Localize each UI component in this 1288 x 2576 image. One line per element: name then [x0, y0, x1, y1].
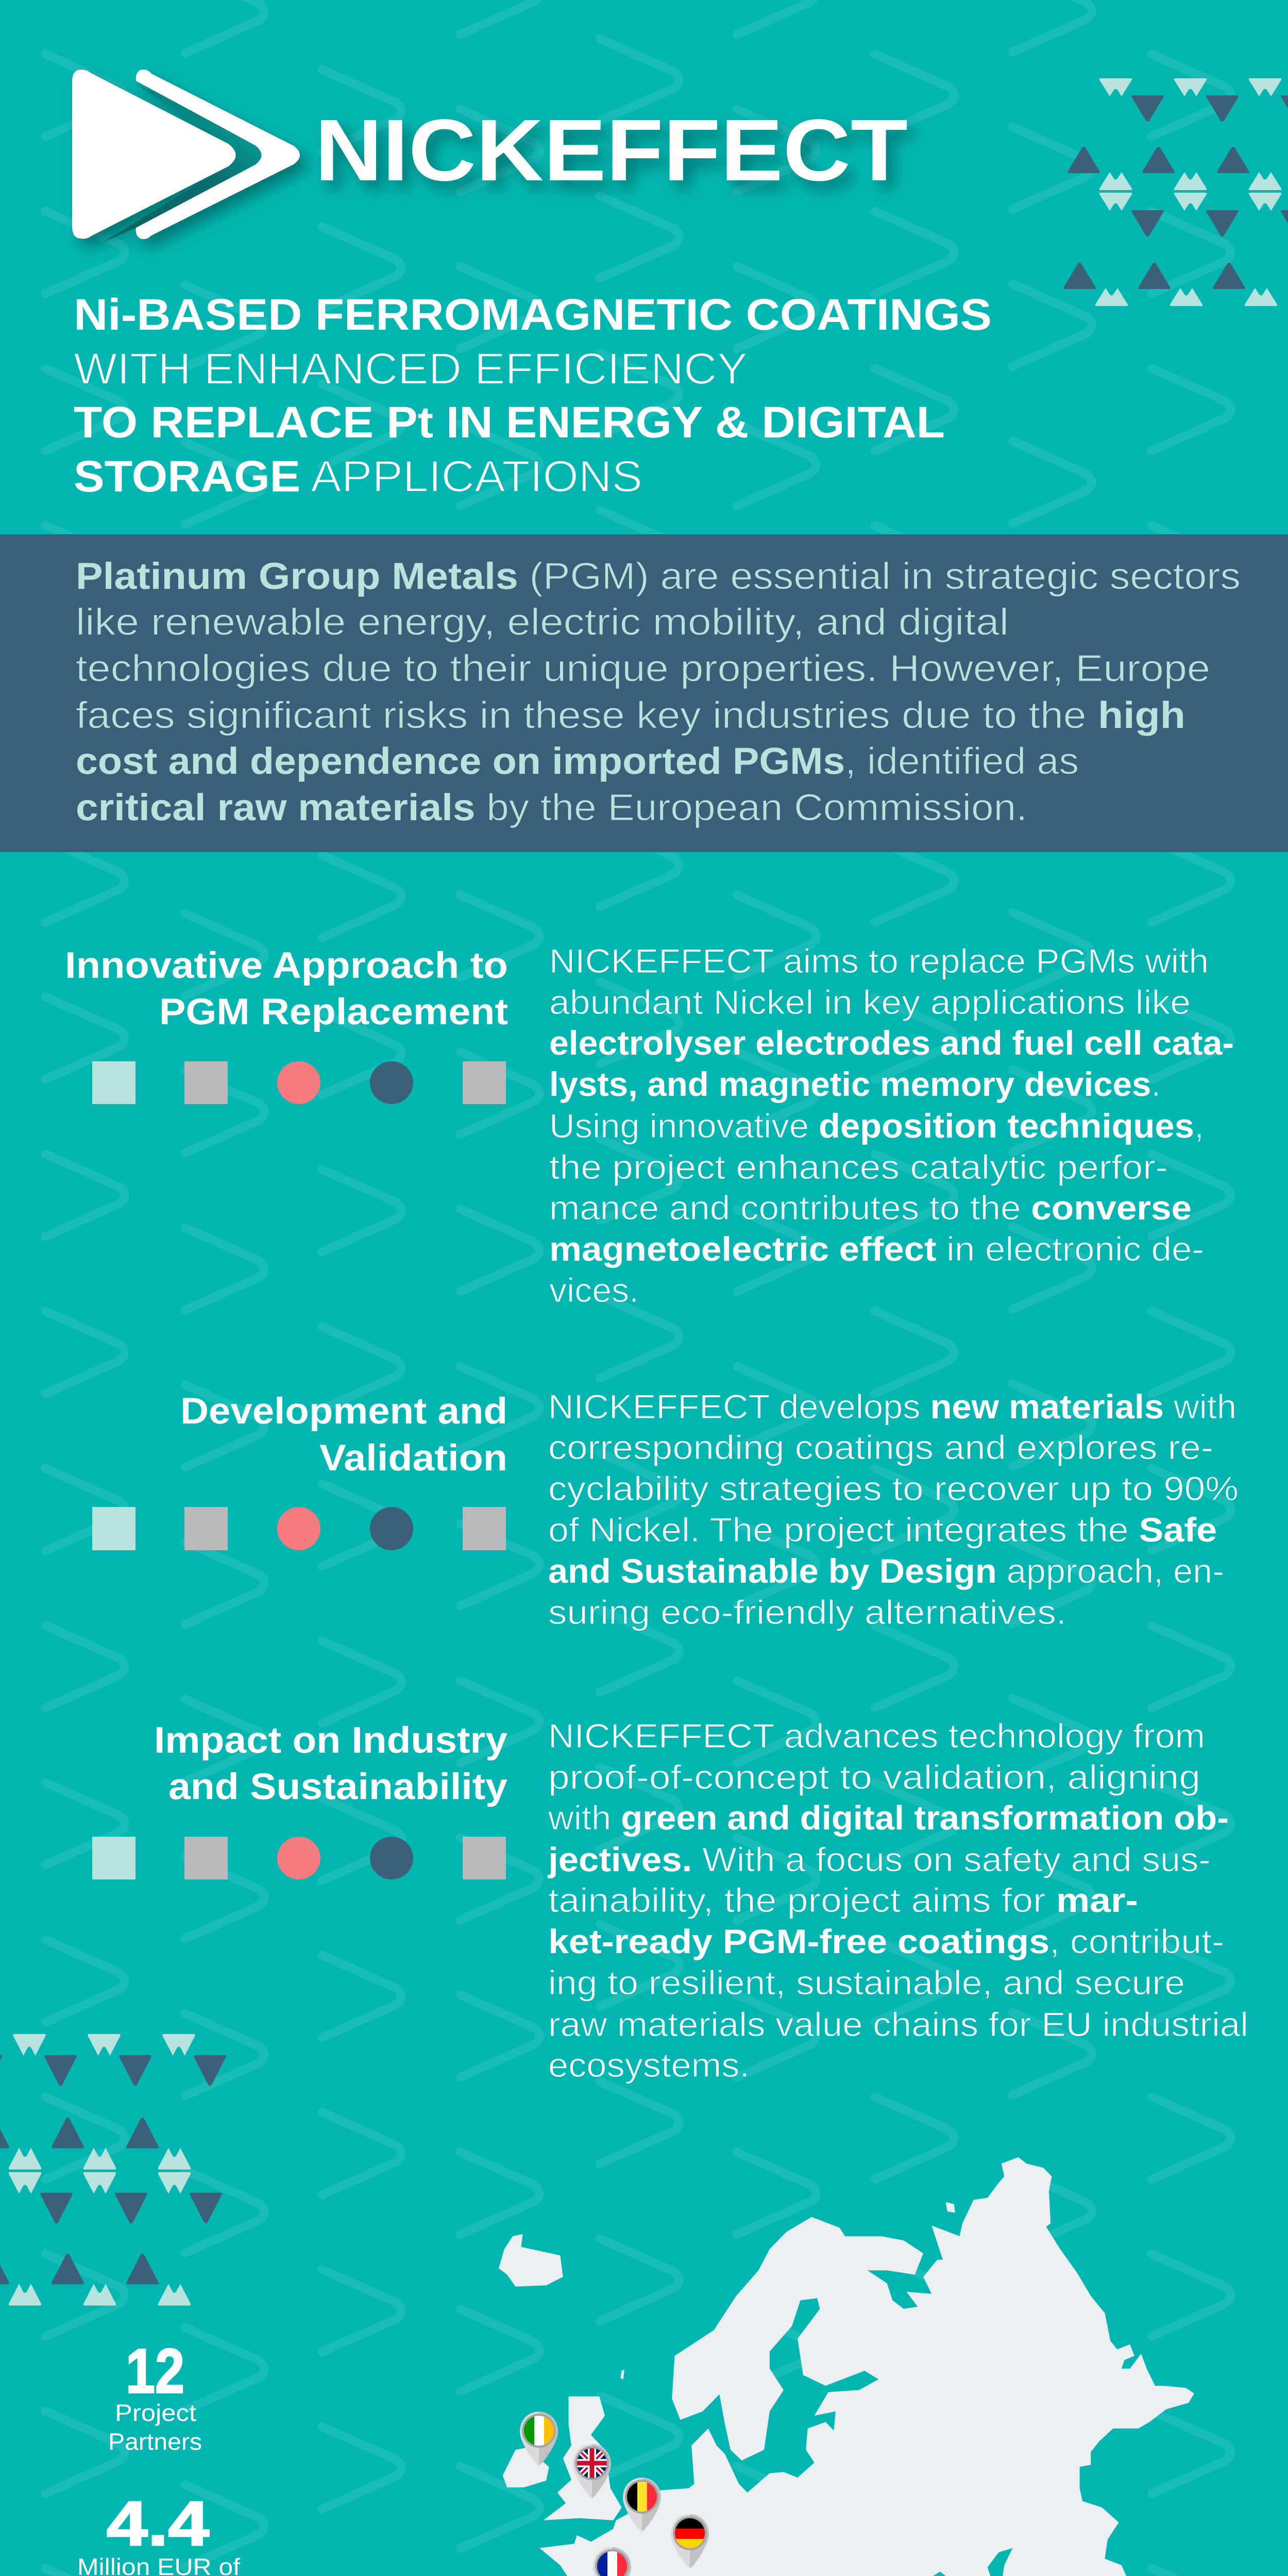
heading: Innovative Approach: PGM Replacement — [159, 991, 508, 1032]
title: STORAGE APPLICATIONS — [74, 452, 642, 501]
text block: impact: jectives. With a focus on safety and sus- — [547, 1840, 1211, 1878]
map pin: Germany — [671, 2514, 709, 2568]
stat: 12 project partners — [108, 2336, 202, 2455]
stat: 12 project partners: 12 — [126, 2336, 184, 2406]
text block: development: suring eco-friendly alternatives. — [548, 1593, 1066, 1631]
text block: development: of Nickel. The project integrates the Safe — [548, 1511, 1217, 1549]
icon: logo chevron — [136, 70, 300, 239]
icon: logo inner shadow band — [103, 82, 262, 242]
text block: innovative approach: the project enhances catalytic perfor- — [549, 1148, 1168, 1186]
title: TO REPLACE Pt IN ENERGY & DIGITAL — [74, 398, 945, 447]
heading: Development and Validation: Validation — [319, 1437, 507, 1479]
intro text: cost and dependence on imported PGMs , identified as — [76, 740, 1079, 782]
intro text: Platinum Group Metals (PGM) are essential in strategic sectors — [76, 555, 1241, 597]
heading: Development and Validation — [180, 1391, 507, 1479]
text block: innovative approach: vices. — [549, 1271, 639, 1309]
map pin: United Kingdom — [573, 2444, 611, 2498]
decorative triangles left — [0, 2034, 226, 2306]
text block: impact: raw materials value chains for EU industrial — [548, 2005, 1248, 2043]
stat: 12 project partners: Project — [115, 2399, 196, 2426]
intro text: like renewable energy, electric mobility, and digital — [76, 601, 1009, 643]
text block: development — [548, 1387, 1239, 1631]
text block: innovative approach: Using innovative deposition techniques , — [549, 1107, 1204, 1145]
logo: NICKEFFECT — [72, 70, 908, 242]
text block: innovative approach: magnetoelectric effect in electronic de- — [549, 1230, 1204, 1268]
icon: logo triangle — [72, 70, 236, 239]
text block: development: cyclability strategies to recover up to 90% — [548, 1469, 1239, 1507]
text block: impact: proof-of-concept to validation, aligning — [548, 1758, 1200, 1796]
text block: impact: ket-ready PGM-free coatings , contribut- — [548, 1922, 1224, 1960]
text block: innovative approach: NICKEFFECT aims to replace PGMs with — [549, 942, 1209, 980]
islands — [499, 2202, 1004, 2576]
text block: development: corresponding coatings and explores re- — [548, 1428, 1213, 1466]
text block: innovative approach: abundant Nickel in key applications like — [549, 983, 1191, 1021]
text block: innovative approach: lysts, and magnetic memory devices . — [549, 1065, 1161, 1103]
intro text — [76, 555, 1241, 828]
europe map — [443, 2157, 1194, 2576]
map pin: Belgium — [623, 2478, 661, 2532]
text block: impact: NICKEFFECT advances technology from — [548, 1717, 1205, 1755]
intro text: critical raw materials by the European Commission. — [76, 787, 1027, 828]
map pin: France — [593, 2547, 631, 2576]
heading: Impact — [154, 1720, 507, 1807]
text block: development: NICKEFFECT develops new materials with — [548, 1387, 1236, 1426]
heading: Impact: Impact on Industry — [154, 1720, 507, 1761]
shape row 2 — [92, 1507, 506, 1550]
text block: development: and Sustainable by Design approach, en- — [548, 1552, 1224, 1590]
stat: 4.4 million EUR — [66, 2488, 251, 2576]
mainland — [443, 2157, 1194, 2576]
title: Ni-BASED FERROMAGNETIC COATINGS — [74, 290, 992, 340]
decorative triangles top right — [1063, 78, 1288, 306]
shape row 1 — [92, 1061, 506, 1104]
title: WITH ENHANCED EFFICIENCY — [74, 344, 748, 394]
text block: innovative approach — [549, 942, 1234, 1309]
text block: innovative approach: mance and contributes to the converse — [549, 1189, 1192, 1227]
stat: 4.4 million EUR: 4.4 — [107, 2488, 209, 2558]
text block: innovative approach: electrolyser electrodes and fuel cell cata- — [549, 1024, 1234, 1062]
heading: Impact: and Sustainability — [168, 1766, 507, 1807]
stat: 12 project partners: Partners — [108, 2428, 202, 2455]
shape row 3 — [92, 1837, 506, 1879]
heading: Innovative Approach — [65, 945, 508, 1032]
text block: impact: tainability, the project aims for mar- — [548, 1881, 1138, 1919]
map pin: Ireland — [520, 2412, 558, 2466]
intro text: technologies due to their unique properties. However, Europe — [76, 648, 1210, 689]
text block: impact: ecosystems. — [548, 2046, 750, 2084]
heading: Development and Validation: Development and — [180, 1391, 507, 1432]
title — [74, 290, 992, 501]
text block: impact: with green and digital transformation ob- — [548, 1799, 1229, 1837]
text block: impact — [547, 1717, 1248, 2084]
intro text: faces significant risks in these key industries due to the high — [76, 694, 1185, 736]
text block: impact: ing to resilient, sustainable, and secure — [548, 1963, 1185, 2002]
heading: Innovative Approach: Innovative Approach to — [65, 945, 508, 986]
panel: PGM intro band — [0, 534, 1288, 852]
logo wordmark: NICKEFFECT — [315, 101, 908, 199]
